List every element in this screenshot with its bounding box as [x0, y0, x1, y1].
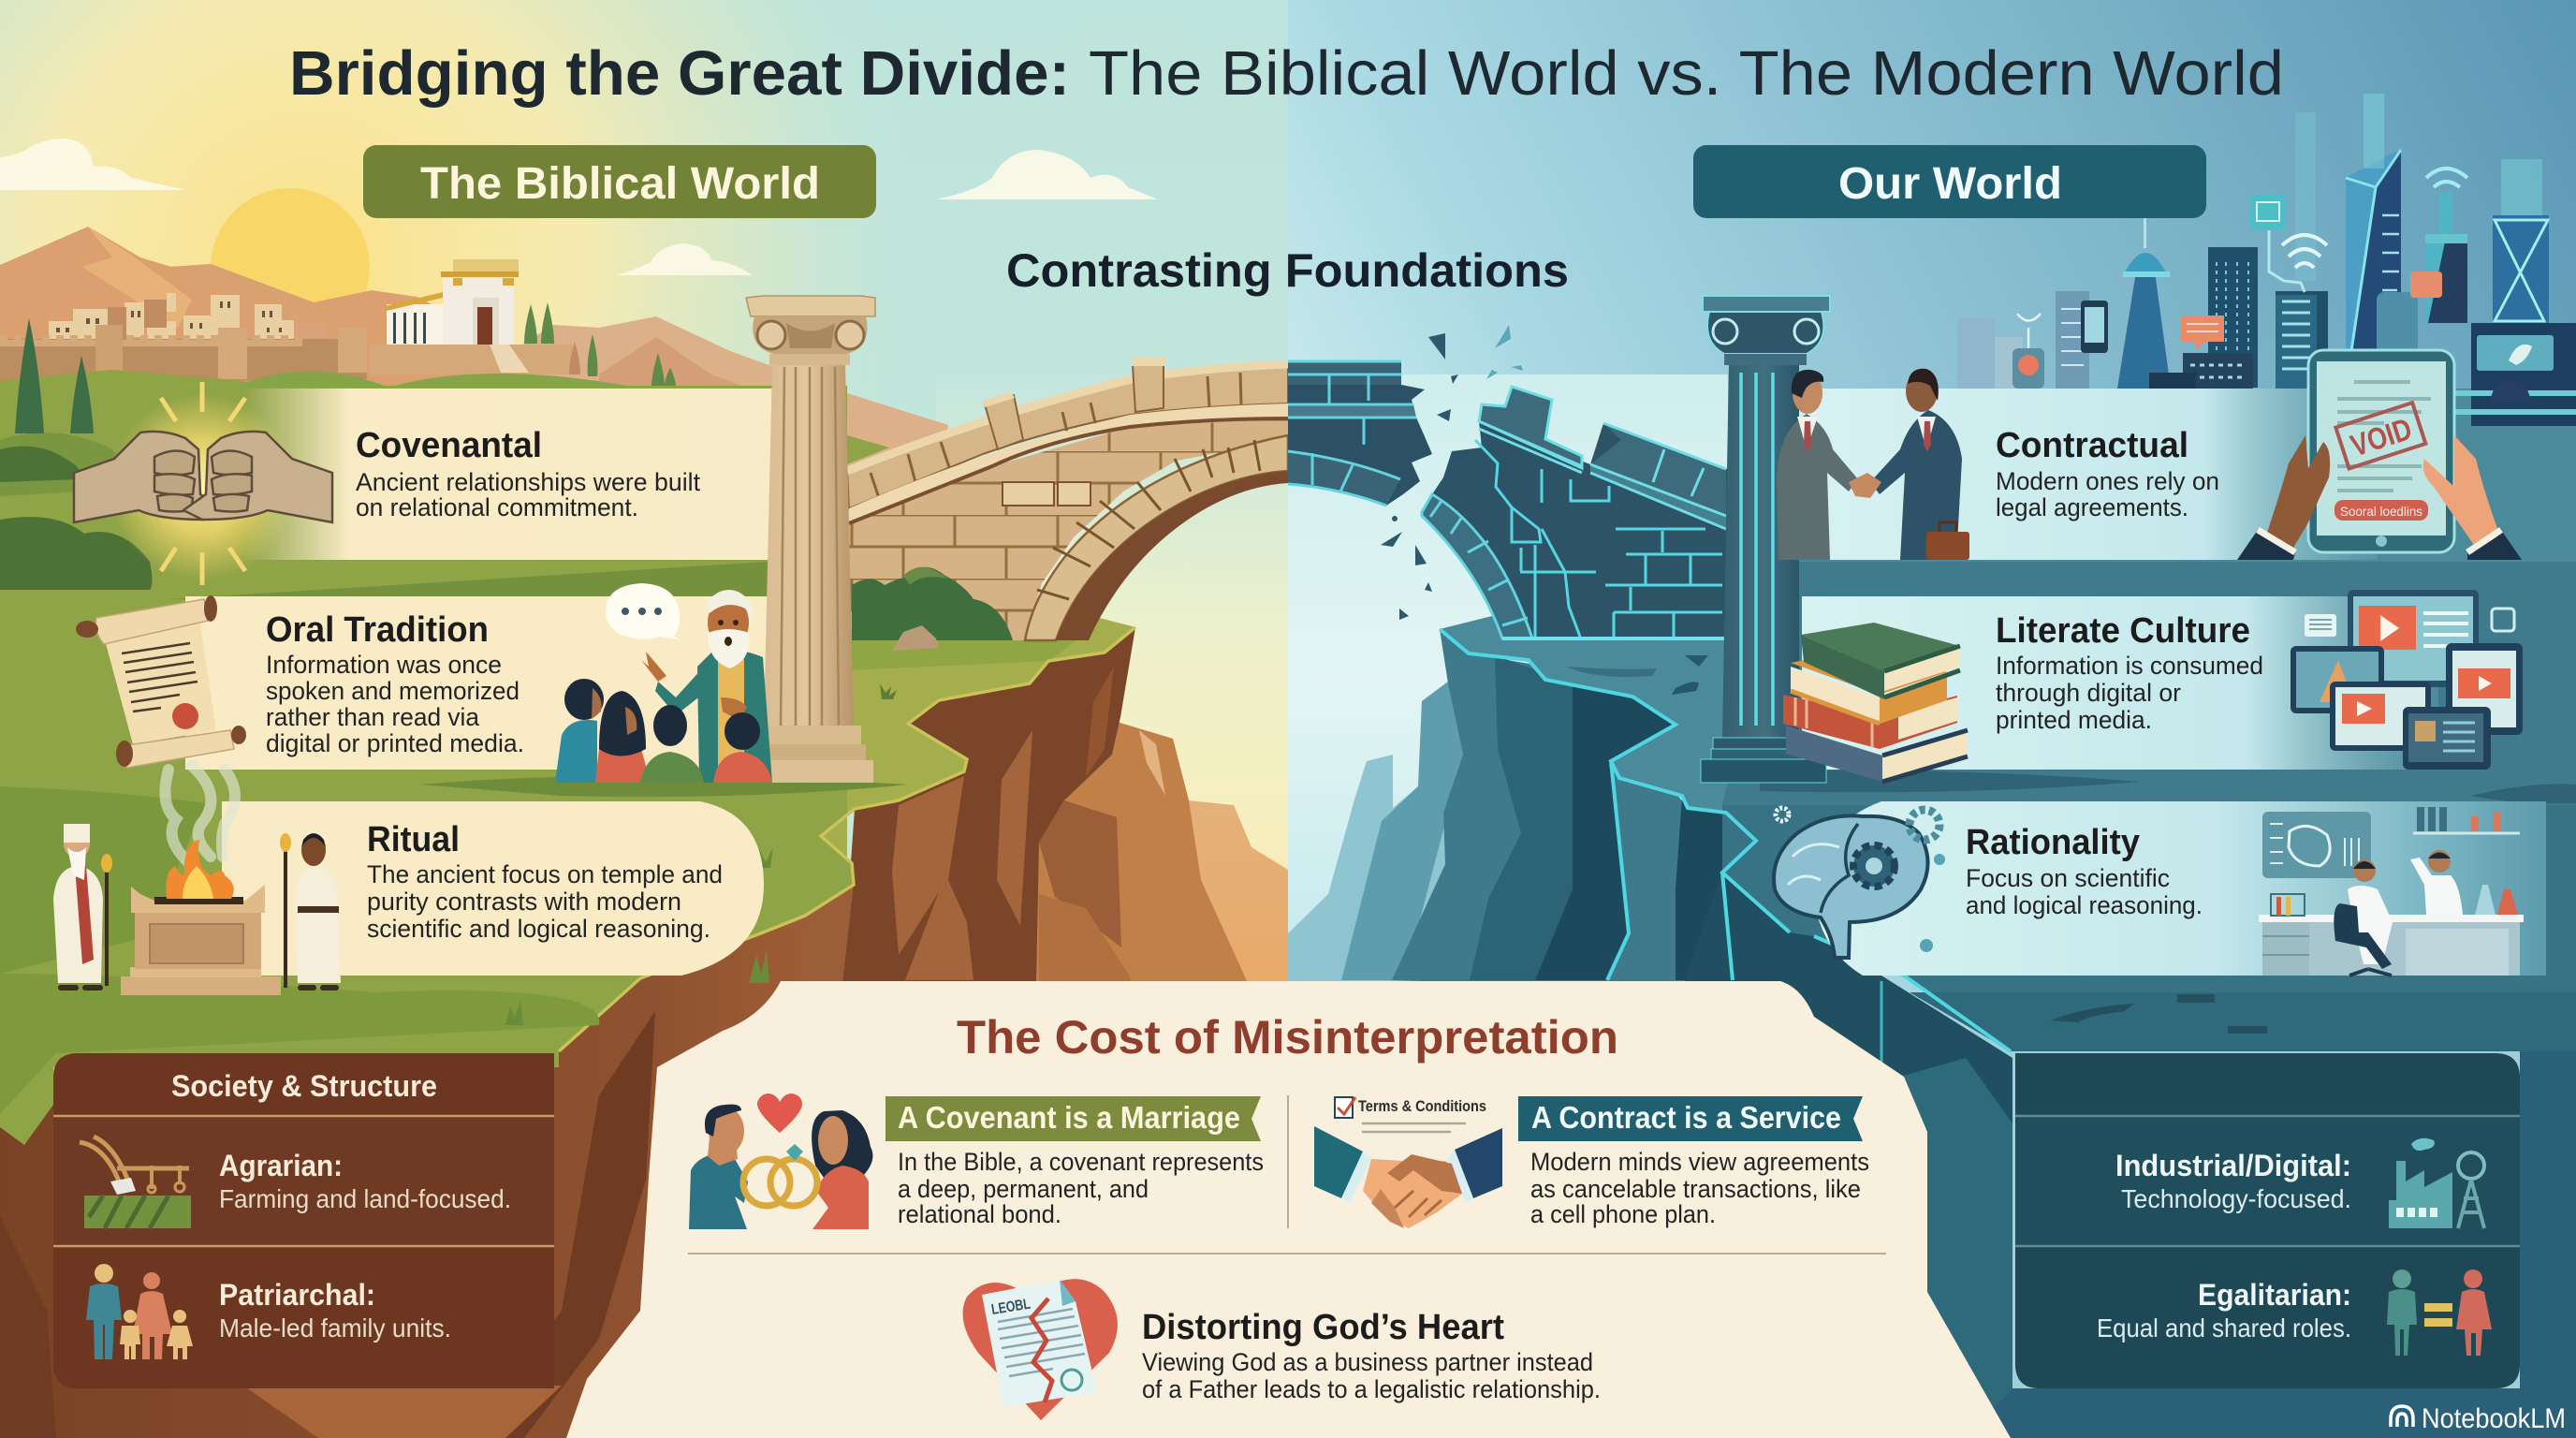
text: covenant explanation: [898, 1148, 1264, 1228]
icon: terms and conditions: [1335, 1097, 1486, 1132]
row: Egalitarian: [2097, 1278, 2351, 1343]
text: covenant explanation: In the Bible, a covenant represents: [898, 1148, 1264, 1176]
icon: elder teaching a group: [555, 583, 772, 783]
card: Literate Culture: through digital or: [1996, 679, 2181, 707]
icon: scroll: [76, 595, 246, 768]
banner: contract: A Contract is a Service: [1531, 1100, 1841, 1135]
icon: altar with priests: [53, 766, 341, 995]
card: Ritual: [222, 801, 764, 976]
icon: plough and field: [80, 1137, 191, 1228]
card: Oral Tradition: rather than read via: [266, 703, 479, 731]
broken modern bridge: [1288, 325, 1727, 638]
row: Patriarchal: [219, 1278, 451, 1343]
icon: broken heart with document: [963, 1279, 1118, 1420]
panel: Modern society: [2015, 1053, 2520, 1388]
modern ground surface with glowing crack: [1440, 389, 2576, 1105]
row: Industrial/Digital: Technology-focused.: [2121, 1184, 2351, 1213]
icon: factory and tower: [2389, 1138, 2484, 1228]
background: modern sky: [1288, 0, 2576, 1030]
card: Literate Culture: [1802, 596, 2438, 770]
row: Patriarchal: Patriarchal:: [219, 1278, 375, 1312]
card: Covenantal: [243, 389, 772, 560]
card: Literate Culture: Information is consumed: [1996, 652, 2263, 680]
divider: vertical: [1287, 1095, 1289, 1228]
biblical cliff and distant rock: [0, 627, 1288, 1438]
row: Agrarian: [219, 1149, 511, 1213]
card: Covenantal: Ancient relationships were built: [356, 468, 701, 496]
clouds: [0, 139, 1158, 275]
panel: The Cost of Misinterpretation: [566, 981, 2011, 1438]
title: [289, 38, 2284, 109]
card: Ritual: Ritual: [367, 820, 460, 859]
card: Rationality: Rationality: [1966, 823, 2140, 862]
icon: tablet marked void: [2237, 350, 2522, 560]
icon: tablet marked void: VOID: [2347, 411, 2416, 462]
modern cliff and ground: [1288, 629, 2576, 1438]
text: Distorting God's Heart: of a Father leads to a legalistic relationship.: [1142, 1375, 1601, 1403]
sun: [211, 188, 370, 347]
text: covenant explanation: a deep, permanent, and: [898, 1175, 1149, 1203]
icon: terms and conditions: Terms & Conditions: [1358, 1097, 1486, 1115]
card: Oral Tradition: spoken and memorized: [266, 677, 520, 705]
icon: media devices: [2291, 590, 2523, 770]
card: Oral Tradition: digital or printed media.: [266, 729, 524, 757]
heading: Contrasting Foundations: Contrasting Foundations: [1006, 244, 1569, 297]
card: Rationality: [1814, 801, 2546, 976]
icon: tablet marked void: Sooral loedlins: [2340, 504, 2422, 519]
modern city skyline: [1957, 94, 2576, 426]
text: contract explanation: [1530, 1148, 1869, 1228]
text: contract explanation: Modern minds view agreements: [1530, 1148, 1869, 1176]
card: Covenantal: on relational commitment.: [356, 493, 638, 521]
icon: clasped fists: [74, 382, 332, 585]
card: Literate Culture: Literate Culture: [1996, 611, 2250, 651]
card: Rationality: Focus on scientific: [1966, 864, 2170, 892]
card: Oral Tradition: Information was once: [266, 651, 502, 679]
card: Ritual: purity contrasts with modern: [367, 888, 681, 916]
cypress trees: [15, 318, 94, 433]
icon: scientist lab: [2259, 807, 2524, 976]
row: Egalitarian: Egalitarian:: [2198, 1278, 2351, 1312]
icon: business handshake: [1314, 1126, 1502, 1228]
header pill: The Biblical World: [363, 145, 876, 218]
card: Oral Tradition: [185, 596, 772, 770]
card: Covenantal: Covenantal: [356, 426, 542, 465]
heading: Society & Structure: Society & Structure: [171, 1069, 437, 1103]
row: Patriarchal: Male-led family units.: [219, 1313, 451, 1343]
text: contract explanation: a cell phone plan.: [1530, 1200, 1716, 1228]
title: Bridging the Great Divide:: [289, 38, 1070, 109]
card: Ritual: scientific and logical reasoning.: [367, 915, 710, 943]
background: biblical sky: [0, 0, 1288, 1030]
card: Ritual: The ancient focus on temple and: [367, 860, 723, 888]
header pill: Our World: Our World: [1838, 159, 2062, 209]
header pill: The Biblical World: The Biblical World: [420, 159, 820, 209]
biblical bridge: [847, 358, 1288, 640]
card: Literate Culture: printed media.: [1996, 706, 2152, 734]
text: contract explanation: as cancelable transactions, like: [1530, 1175, 1861, 1203]
panel: Society & Structure: [53, 1053, 554, 1388]
divider: horizontal: [688, 1253, 1886, 1255]
row: Industrial/Digital: Industrial/Digital:: [2115, 1149, 2351, 1182]
text: Distorting God's Heart: Viewing God as a business partner instead: [1142, 1348, 1593, 1376]
text: Distorting God's Heart: [1142, 1308, 1601, 1403]
biblical landscape: mountains, city and temple: [0, 227, 948, 524]
row: Agrarian: Farming and land-focused.: [219, 1184, 511, 1213]
card: Contractual: Contractual: [1996, 426, 2188, 465]
card: Contractual: [1797, 389, 2378, 560]
card: Oral Tradition: Oral Tradition: [266, 610, 489, 650]
pillar: biblical column: [746, 296, 875, 783]
card: Contractual: legal agreements.: [1996, 493, 2188, 521]
banner: covenant: A Covenant is a Marriage: [898, 1100, 1240, 1135]
biblical green ground: [0, 370, 1135, 1145]
icon: stack of books: [1783, 623, 1968, 782]
icon: equal figures: [2387, 1269, 2492, 1356]
icon: family: [86, 1264, 193, 1359]
icon: brain with gears: [1774, 808, 1945, 958]
icon: couple with rings: [689, 1093, 872, 1229]
row: Agrarian: Agrarian:: [219, 1149, 343, 1182]
card: Contractual: Modern ones rely on: [1996, 467, 2219, 495]
header pill: Our World: [1693, 145, 2206, 218]
text: Distorting God's Heart: Distorting God’s Heart: [1142, 1308, 1504, 1347]
icon: broken heart with document: LEOBL: [990, 1297, 1032, 1318]
title: The Biblical World vs. The Modern World: [1089, 38, 2284, 109]
pillar: modern column: [1701, 296, 1830, 783]
card: Rationality: and logical reasoning.: [1966, 891, 2203, 919]
row: Egalitarian: Equal and shared roles.: [2097, 1313, 2351, 1343]
text: covenant explanation: relational bond.: [898, 1200, 1061, 1228]
heading: The Cost of Misinterpretation: The Cost of Misinterpretation: [957, 1011, 1618, 1064]
row: Industrial/Digital: [2115, 1149, 2351, 1213]
bush and rock under bridge: [852, 567, 1013, 651]
icon: businessmen handshake: [1777, 369, 1969, 560]
